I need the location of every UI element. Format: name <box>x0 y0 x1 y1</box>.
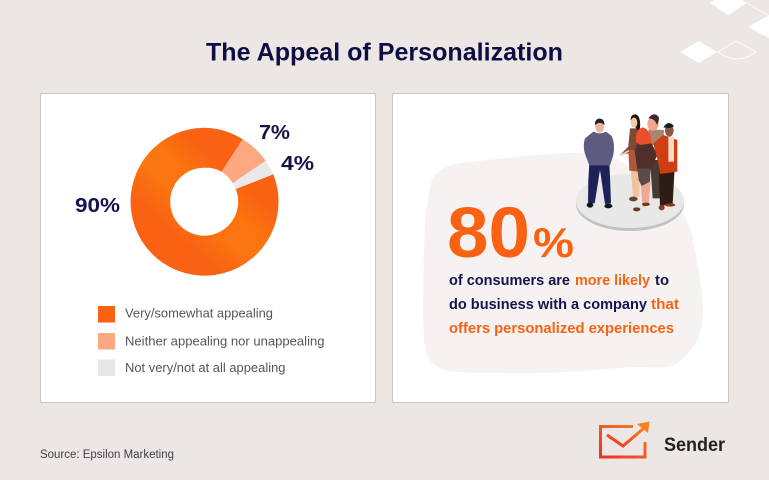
statement <box>449 273 679 337</box>
donut chart <box>131 128 279 276</box>
decorative diamonds <box>680 0 769 63</box>
statement: that <box>651 297 679 313</box>
man in tan shirt <box>647 114 664 198</box>
woman with red hair <box>633 127 657 211</box>
big number: % <box>533 219 574 266</box>
title: The Appeal of Personalization <box>206 38 563 66</box>
panel: statistic <box>392 94 728 402</box>
legend <box>98 306 325 376</box>
woman in brown dress <box>619 114 640 201</box>
legend: Very/somewhat appealing <box>125 306 273 320</box>
legend: Not very/not at all appealing <box>125 361 286 375</box>
source: Source: Epsilon Marketing <box>40 449 174 461</box>
statement: do business with a company <box>449 297 648 313</box>
panel: donut chart <box>40 94 376 402</box>
value label 90%: 90% <box>75 195 120 217</box>
background blob <box>423 153 703 373</box>
man in red jacket <box>653 123 677 210</box>
logo: Sender <box>600 422 725 457</box>
people illustration <box>576 114 684 231</box>
big number <box>447 194 574 273</box>
man in blue sweater <box>584 119 614 208</box>
platform <box>576 177 684 231</box>
value label 4%: 4% <box>281 153 314 175</box>
logo: Sender: Sender <box>664 434 725 456</box>
statement: to <box>655 273 669 289</box>
big number: 80 <box>447 194 530 273</box>
statement: more likely <box>575 273 651 289</box>
legend: Neither appealing nor unappealing <box>125 334 325 348</box>
value label 7%: 7% <box>259 122 290 144</box>
statement: of consumers are <box>449 273 570 289</box>
statement: offers personalized experiences <box>449 321 674 337</box>
